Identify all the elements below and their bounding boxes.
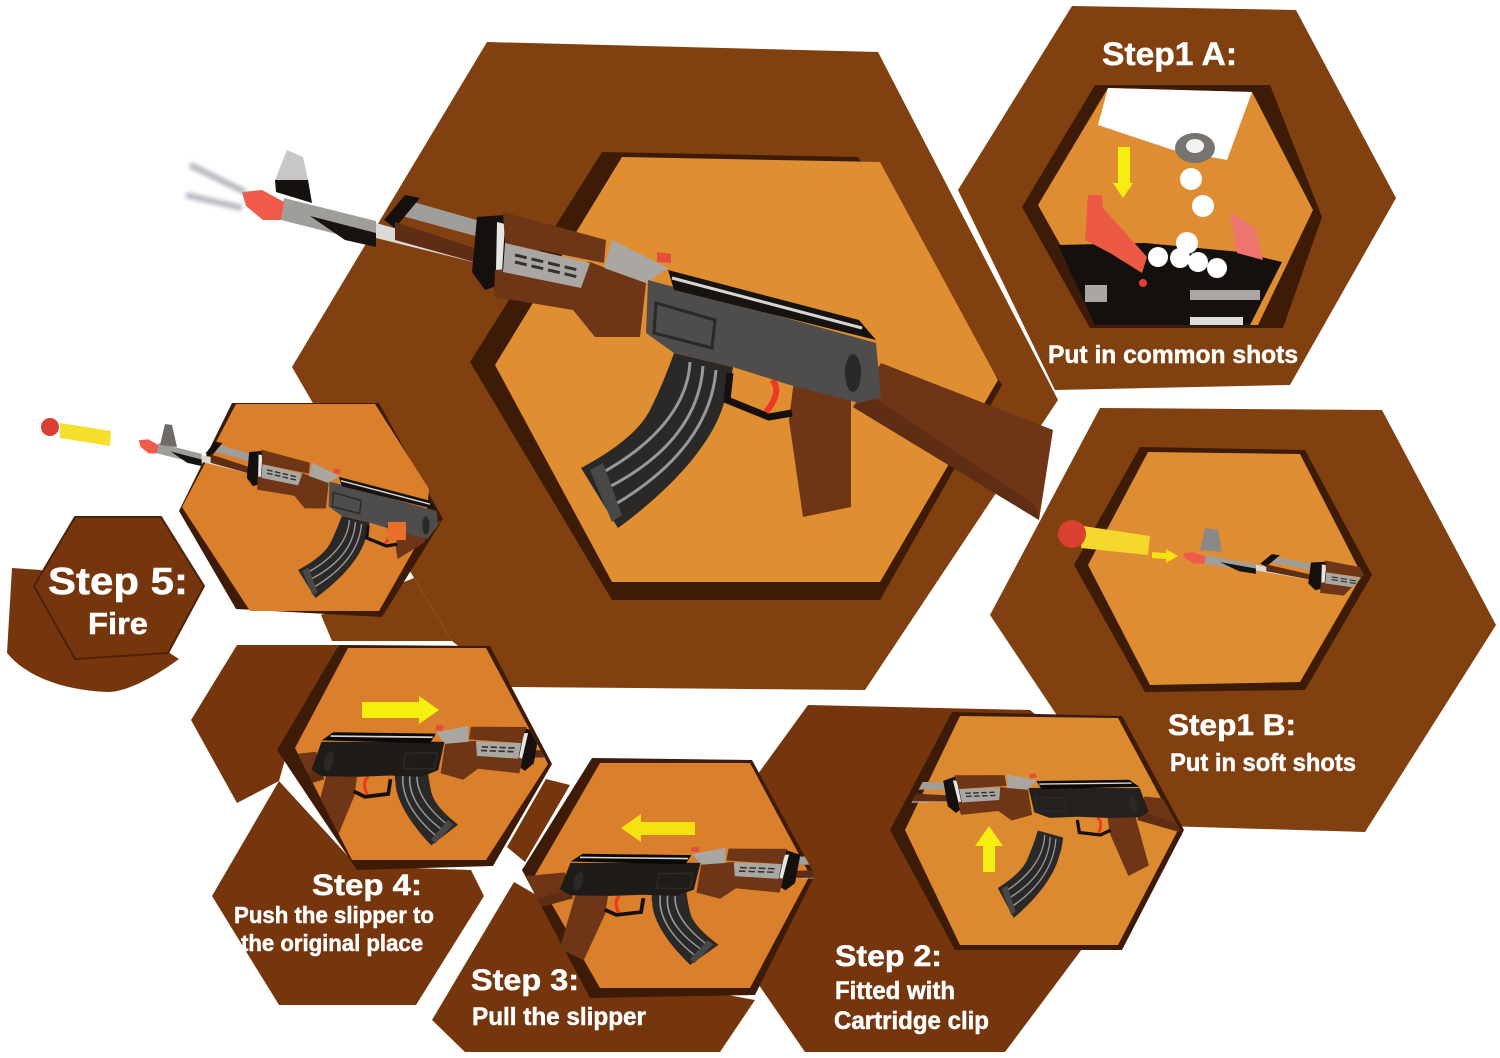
trigger box	[388, 522, 406, 540]
caption: Fire: Fire	[88, 606, 148, 641]
muzzle motion streaks	[186, 165, 245, 208]
caption: Put in soft shots: Put in soft shots	[1170, 749, 1356, 777]
caption: Fitted with Cartridge clip	[834, 977, 989, 1035]
main hexagon orange centre	[495, 157, 998, 582]
small rifle front	[1183, 552, 1364, 596]
caption: Pull the slipper: Pull the slipper	[472, 1003, 646, 1031]
caption: Fitted with Cartridge clip: Cartridge clip	[834, 1007, 989, 1035]
brown strip under step 5 rifle	[321, 578, 452, 641]
panel: step 1B	[990, 408, 1500, 832]
panel: step 5 rifle hexagon	[41, 403, 443, 617]
rifle	[525, 846, 815, 965]
rifle without clip	[912, 774, 1180, 876]
heading: Step 2: Step 2:	[835, 940, 942, 973]
step 3 inner shadow	[522, 758, 815, 998]
cartridge clip	[998, 830, 1063, 918]
heading: Step 5: Step 5:	[48, 561, 188, 603]
caption: Push the slipper to the original place: Push the slipper to	[234, 902, 434, 928]
rifle	[298, 724, 545, 846]
illustration: loading common shots	[1058, 88, 1282, 325]
step 5 label hexagon	[34, 517, 204, 659]
rifle firing	[138, 439, 441, 598]
panel: step 4	[191, 645, 552, 1005]
heading: Step1 A: Step1 A:	[1102, 36, 1237, 72]
step 3 caption hexagon	[432, 882, 755, 1052]
arrow: right	[362, 696, 439, 724]
panel: step 3	[432, 758, 815, 1052]
panel: step 1A	[958, 6, 1396, 390]
heading: Step1 B: Step1 B:	[1168, 709, 1296, 742]
step 4 orange centre	[295, 648, 548, 860]
sight on barrel	[1200, 528, 1222, 552]
step 2 orange centre	[905, 716, 1178, 945]
foam dart in flight	[41, 418, 111, 446]
step 1A inner shadow	[1022, 85, 1322, 328]
heading: Step 4: Step 4:	[312, 869, 422, 902]
arrow: left	[621, 814, 695, 842]
caption: Fitted with Cartridge clip: Fitted with	[835, 977, 955, 1005]
caption: Push the slipper to the original place: the original place	[241, 930, 423, 956]
heading: Step 3: Step 3:	[471, 964, 579, 997]
step 5 orange centre	[182, 404, 429, 611]
panel: step 2	[759, 705, 1184, 1052]
panel: main rifle hexagon	[292, 42, 1058, 690]
step 1B orange centre	[1088, 452, 1362, 685]
front sight	[275, 150, 312, 203]
main rifle	[186, 150, 1053, 528]
foam dart	[1058, 520, 1150, 555]
arrow: dart into barrel	[1152, 549, 1178, 563]
panel: step 5 label	[7, 517, 204, 692]
main hexagon inner shadow	[470, 152, 1002, 600]
caption: Put in common shots: Put in common shots	[1048, 341, 1298, 369]
arrow: up	[975, 826, 1003, 872]
step 2 inner shadow	[890, 712, 1184, 950]
step 4 caption hexagon	[212, 781, 484, 1005]
sight	[160, 424, 177, 447]
step 3 orange centre	[535, 763, 810, 988]
step 1B inner shadow	[1074, 447, 1372, 692]
step 4 inner shadow	[277, 645, 552, 870]
step 1A orange centre	[1038, 88, 1313, 325]
caption: Push the slipper to the original place	[234, 902, 434, 956]
